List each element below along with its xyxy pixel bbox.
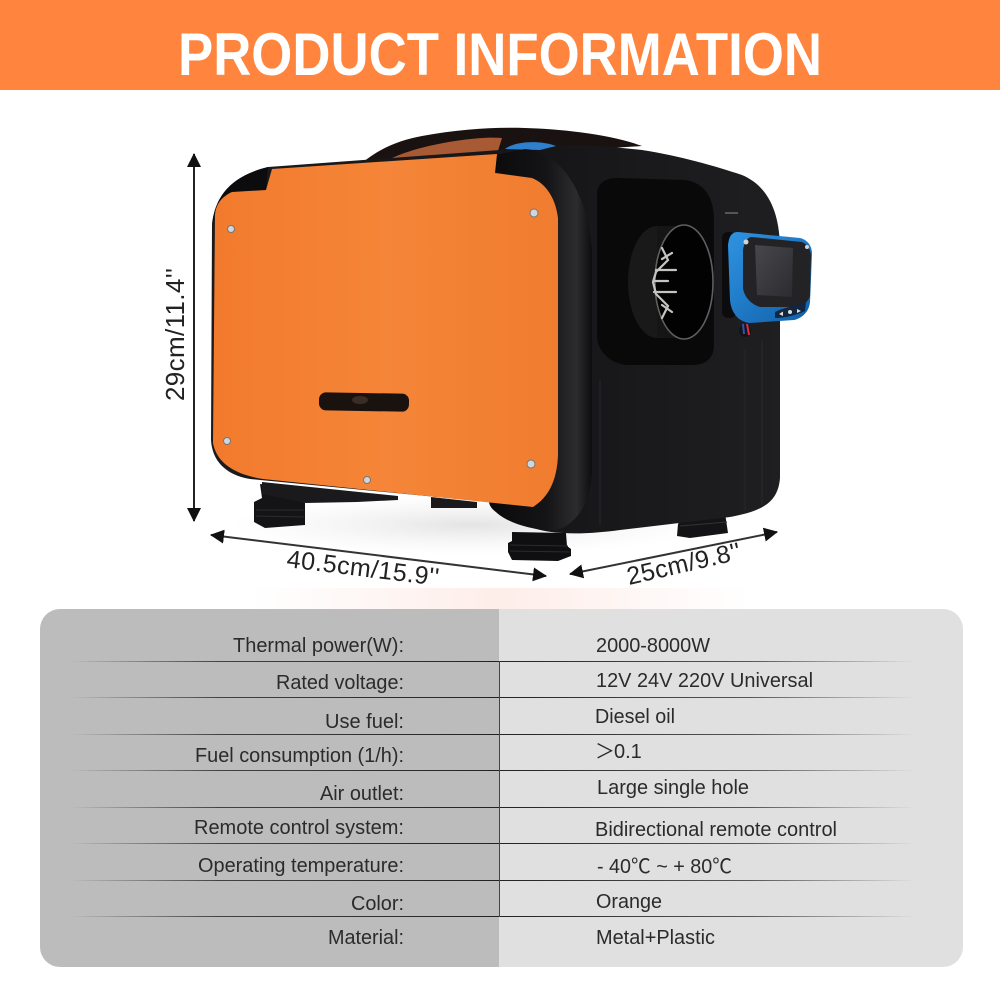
controller cable: [739, 324, 751, 337]
heat exchanger fins: [653, 248, 676, 318]
ribbed rear edge: [600, 340, 762, 525]
row labels: Remote control system:: [194, 817, 404, 839]
handle slot: [319, 392, 409, 412]
row labels: Air outlet:: [320, 783, 404, 805]
row labels: [194, 635, 404, 949]
LCD screen: [755, 245, 793, 297]
row values: ＞: [595, 741, 615, 763]
control buttons: [775, 302, 806, 318]
rear foot: [677, 513, 728, 538]
depth dimension: [570, 532, 777, 591]
air outlet recess: [597, 178, 714, 365]
right value column: [499, 609, 963, 967]
row labels: Fuel consumption (1/h):: [195, 745, 404, 767]
row labels: Material:: [328, 927, 404, 949]
side bumper: [489, 149, 592, 531]
row values: Bidirectional remote control: [595, 819, 837, 841]
black housing: [211, 145, 780, 533]
control panel: [722, 232, 812, 323]
display bezel: [743, 237, 811, 307]
height dimension: 29cm/11.4'': [160, 268, 190, 401]
orange front panel: [213, 154, 558, 507]
outlet duct: [628, 226, 686, 338]
row values: Orange: [596, 891, 662, 913]
row values: 0.1: [614, 741, 642, 763]
front foot: [508, 532, 571, 561]
header banner: [0, 0, 1000, 90]
row labels: Rated voltage:: [276, 672, 404, 694]
title: PRODUCT INFORMATION: [178, 21, 822, 88]
pink reflection: [250, 588, 750, 609]
row labels: Operating temperature:: [198, 855, 404, 877]
carry handle: [362, 128, 642, 165]
row values: Metal+Plastic: [596, 927, 715, 949]
width dimension: [211, 535, 546, 592]
row values: Large single hole: [597, 777, 749, 799]
row labels: Use fuel:: [325, 711, 404, 733]
row values: 12V 24V 220V Universal: [596, 670, 813, 692]
row values: 2000-8000W: [596, 635, 710, 657]
specification table: [40, 609, 963, 967]
row dividers: [70, 661, 915, 917]
width dimension: 40.5cm/15.9'': [285, 545, 441, 592]
status slot: [725, 212, 738, 214]
depth dimension: 25cm/9.8'': [624, 537, 743, 591]
left corner bumper: [212, 167, 268, 225]
panel screws: [224, 209, 538, 484]
row labels: Thermal power(W):: [233, 635, 404, 657]
left foot: [254, 484, 305, 528]
floor shadow: [230, 495, 710, 555]
row values: [595, 635, 837, 949]
row values: Diesel oil: [595, 706, 675, 728]
product photo: heater unit: [211, 128, 812, 561]
underside connectors: [262, 482, 477, 508]
left label column: [40, 609, 499, 967]
blue top cap: [505, 142, 556, 150]
row labels: Color:: [351, 893, 404, 915]
row values: - 40℃ ~ + 80℃: [597, 856, 732, 878]
